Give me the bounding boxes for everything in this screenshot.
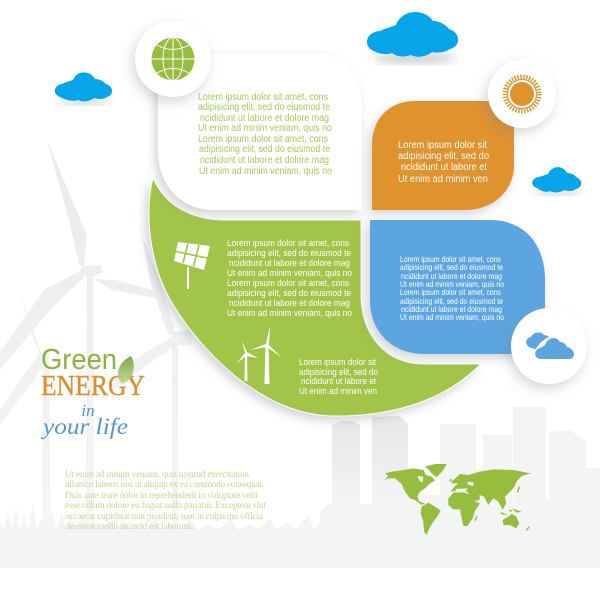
icon: cloud badge (511, 308, 587, 384)
text: green upper: ncididunt ut labore et dolore mag (229, 297, 350, 308)
cloud: left (55, 72, 112, 105)
small left turbine (0, 292, 50, 530)
title: Green Energy (41, 344, 145, 439)
text: white panel: Ut enim ad minim veniam, quis no (198, 123, 332, 134)
background: city skyline (0, 407, 600, 568)
icon: sun badge (488, 60, 556, 128)
text: blue panel: Lorem ipsum dolor sit amet, cons (400, 287, 501, 297)
title: Green Energy: in (81, 401, 95, 420)
cloud: right (532, 167, 581, 196)
cloud: top (367, 12, 458, 64)
text: green lower: adipisicing elit, sed do (299, 366, 378, 377)
icon: wind turbines (237, 326, 281, 384)
title: Green Energy: your life (41, 414, 128, 439)
large turbine (0, 140, 165, 530)
text: green lower: Lorem ipsum dolor sit (299, 356, 376, 367)
text block: bottom paragraph: Duis aute irure dolor in reprehenderit in voluptate velit (65, 491, 258, 501)
icon: solar panel (174, 242, 210, 289)
text: blue panel (400, 254, 504, 322)
text: blue panel: Ut enim ad minim veniam, quis no (400, 279, 504, 289)
text block: bottom paragraph (65, 470, 266, 532)
text: green upper: adipisicing elit, sed do eiusmod te (227, 247, 351, 258)
title: Green Energy: ENERGY (41, 370, 145, 402)
text: blue panel: Ut enim ad minim veniam, quis no (400, 312, 504, 322)
text: green upper: ncididunt ut labore et dolore mag (229, 257, 350, 268)
text block: bottom paragraph: occaecat cupidatat non proident, sunt in culpa qui officia (65, 511, 263, 522)
text block: bottom paragraph: deserunt mollit anim id est laborum. (65, 522, 193, 532)
text: green upper: Ut enim ad minim veniam, quis no (227, 267, 352, 278)
text: blue panel: adipisicing elit, sed do eiusmod te (400, 296, 503, 306)
text block: bottom paragraph: Ut enim ad minim veniam, quis nostrud exercitation (65, 470, 249, 480)
text: white panel: Lorem ipsum dolor sit amet, cons (198, 92, 328, 103)
text: green upper: Lorem ipsum dolor sit amet, cons (227, 277, 349, 288)
text block: bottom paragraph: ullamco laboris nisi ut aliquip ex ea commodo consequat. (65, 480, 264, 490)
panel: white (158, 53, 362, 210)
text: green lower (299, 356, 378, 396)
panel: blue (370, 220, 545, 354)
text: blue panel: adipisicing elit, sed do eiusmod te (400, 262, 503, 272)
text: orange panel (398, 140, 490, 185)
text: white panel: Lorem ipsum dolor sit amet, cons (198, 134, 328, 145)
title: Green Energy: Green (41, 344, 117, 376)
text: orange panel: Lorem ipsum dolor sit (398, 140, 487, 151)
text: orange panel: adipisicing elit, sed do (398, 151, 490, 162)
text: white panel: adipisicing elit, sed do eiusmod te (198, 102, 330, 113)
text: blue panel: Lorem ipsum dolor sit amet, cons (400, 254, 501, 264)
text: white panel: ncididunt ut labore et dolore mag (200, 113, 329, 124)
right turbine behind panel (100, 235, 192, 530)
panel: green (149, 178, 481, 416)
text block: bottom paragraph: esse cillum dolore eu fugiat nulla pariatur. Excepteur sint (65, 500, 266, 511)
text: white panel (198, 92, 332, 177)
text: blue panel: ncididunt ut labore et dolore mag (401, 304, 502, 314)
text: green upper (227, 237, 352, 318)
text: white panel: ncididunt ut labore et dolore mag (200, 155, 329, 166)
icon: leaf (118, 356, 134, 384)
text: orange panel: Ut enim ad minim ven (398, 174, 488, 185)
text: blue panel: ncididunt ut labore et dolore mag (401, 271, 502, 281)
background: wind turbines (0, 140, 192, 530)
text: white panel: Ut enim ad minim veniam, quis no (199, 166, 332, 177)
text: green upper: Lorem ipsum dolor sit amet, cons (227, 237, 349, 248)
text: white panel: adipisicing elit, sed do eiusmod te (199, 144, 330, 155)
background: grass (0, 503, 330, 568)
world map (384, 464, 531, 535)
text: green lower: Ut enim ad minim ven (299, 385, 377, 396)
text: orange panel: ncididunt ut labore et (401, 162, 487, 173)
panel: orange (372, 101, 514, 210)
text: green lower: ncididunt ut labore et (301, 375, 376, 386)
text: green upper: Ut enim ad minim veniam, quis no (227, 307, 352, 318)
icon: globe badge (135, 21, 211, 97)
text: green upper: adipisicing elit, sed do eiusmod te (227, 287, 351, 298)
